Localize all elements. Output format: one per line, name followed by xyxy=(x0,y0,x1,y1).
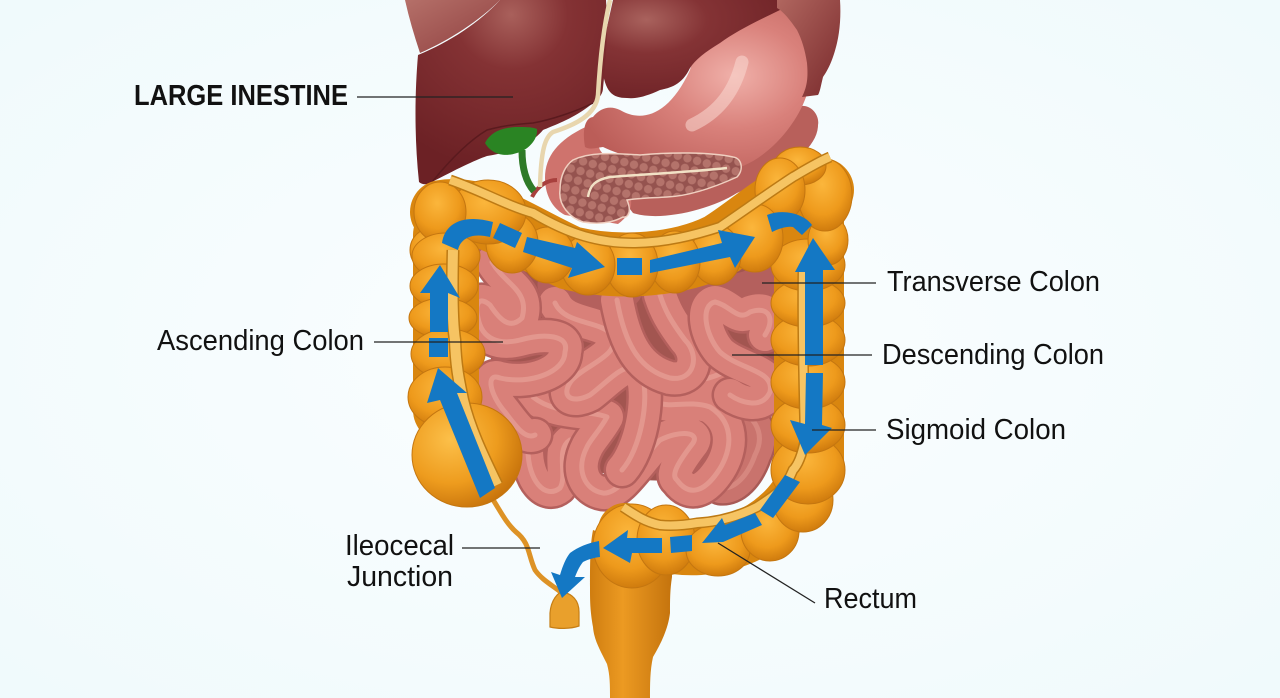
organ: rectum xyxy=(590,530,672,698)
organ: colon haustra xyxy=(408,147,852,588)
label: transverse colon: Transverse Colon xyxy=(887,266,1100,298)
flow arrows xyxy=(420,212,835,598)
marker: rectum square xyxy=(670,535,692,553)
label: sigmoid colon: Sigmoid Colon xyxy=(886,414,1066,446)
marker: transverse square two xyxy=(617,258,642,275)
arrow: hepatic flexure curve xyxy=(442,219,493,250)
arrow: ascending lower xyxy=(427,368,495,498)
organ: small intestine xyxy=(477,262,778,493)
label: title: LARGE INESTINE xyxy=(134,80,348,112)
organ: colon xyxy=(408,147,852,588)
label: rectum: Rectum xyxy=(824,583,917,615)
arrow: transverse second xyxy=(650,230,755,273)
organ: liver far right lobe xyxy=(777,0,840,97)
label: ileocecal junction: Ileocecal xyxy=(345,530,454,562)
arrow: descending down xyxy=(790,373,832,455)
arrow: rectum xyxy=(603,530,662,563)
organ: duodenum xyxy=(532,125,631,224)
marker: ascending square xyxy=(429,338,448,357)
label: ascending colon: Ascending Colon xyxy=(157,325,364,357)
organ: colon base silhouette xyxy=(442,190,822,548)
label: ileocecal junction: Junction xyxy=(347,561,453,593)
label: ileocecal junction xyxy=(345,530,540,593)
arrow: sigmoid xyxy=(702,513,762,543)
marker: sigmoid dash xyxy=(760,475,800,518)
organ: bile duct xyxy=(540,0,610,187)
organ: stomach xyxy=(584,0,815,168)
arrow: splenic flexure curve xyxy=(767,212,812,235)
organ: liver right lobe xyxy=(602,0,780,98)
organ: liver left lobe xyxy=(405,0,607,184)
organ: appendix xyxy=(490,495,579,628)
label: descending colon: Descending Colon xyxy=(882,339,1104,371)
arrow: transverse first xyxy=(523,237,605,278)
organ: colon muscle band xyxy=(450,157,830,526)
organ: gallbladder xyxy=(485,127,537,191)
arrow: final curve xyxy=(551,541,600,598)
arrow: descending up xyxy=(795,238,835,365)
arrow: ascending upper xyxy=(420,265,460,332)
marker: transverse square one xyxy=(493,223,522,248)
label: rectum xyxy=(718,543,917,615)
organ: pancreas xyxy=(560,153,741,223)
organ: lower stomach xyxy=(600,106,818,216)
